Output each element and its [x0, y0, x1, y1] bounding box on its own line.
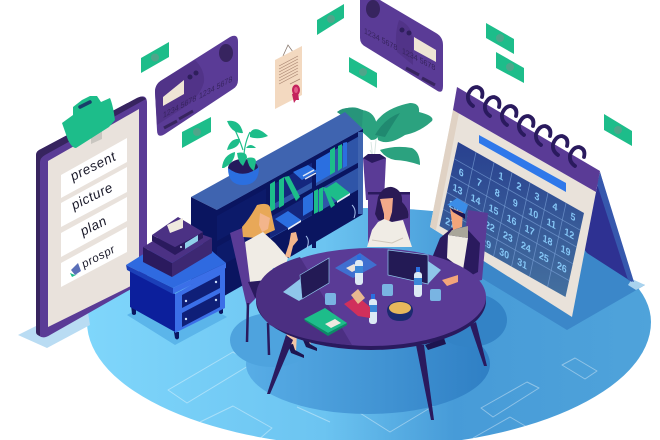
calendar stand: [577, 172, 632, 282]
list item: prospr logo: prospr: [79, 243, 118, 271]
date grid: 10: [528, 206, 539, 223]
date grid: 17: [524, 223, 535, 239]
date grid: 19: [560, 243, 571, 260]
skirt: [248, 280, 267, 298]
date grid: 13: [452, 182, 463, 199]
cash register: [143, 217, 212, 277]
date grid: 25: [538, 250, 550, 266]
date grid: 12: [564, 226, 575, 243]
arms: [266, 275, 296, 293]
face: [259, 213, 270, 232]
date grid: 15: [488, 202, 499, 219]
date grid: 5: [570, 211, 576, 225]
cash cabinet: [126, 228, 227, 345]
floor shadows: [230, 240, 645, 414]
date grid: 23: [502, 229, 514, 246]
laptop left: [283, 258, 329, 301]
date grid: 11: [546, 216, 557, 233]
bookshelf: [191, 112, 363, 300]
clip: [62, 96, 115, 148]
date grid: 14: [470, 192, 481, 209]
legs of woman left: [286, 330, 317, 358]
potted plant on shelf: [222, 121, 268, 185]
list item: picture: [61, 167, 127, 227]
date grid: [440, 142, 584, 297]
date grid: 7: [476, 177, 483, 191]
water bottles: [355, 255, 422, 324]
date grid: 2: [516, 180, 522, 194]
bill: [496, 52, 524, 83]
list item: plan: plan: [77, 213, 109, 239]
cups: [325, 284, 441, 305]
blue notebook: [335, 253, 377, 278]
calendar: [430, 87, 634, 317]
date grid: 21: [466, 209, 478, 226]
shelf front: [217, 129, 363, 300]
list item: present: present: [67, 148, 119, 184]
woman left: [242, 204, 298, 298]
certificate: [275, 45, 302, 109]
date grid: 24: [520, 239, 532, 256]
tissue box: [344, 289, 370, 318]
list item: plan: [61, 197, 127, 257]
woman right: [367, 187, 412, 247]
large plant: [337, 103, 432, 200]
shelf side: [191, 197, 217, 300]
date grid: 6: [458, 166, 465, 180]
list item: prospr logo: [61, 227, 127, 287]
credit card right: 1234 5678: [402, 46, 436, 73]
date grid: 9: [512, 197, 519, 211]
bill: [486, 23, 514, 54]
bill: [141, 42, 169, 73]
man: [428, 198, 480, 282]
date grid: 31: [517, 256, 528, 273]
snack bowl: [387, 301, 413, 321]
bill: [317, 4, 344, 35]
laptop right: [388, 250, 441, 284]
man hand: [442, 275, 458, 286]
credit card left: 1234 5678: [163, 93, 197, 120]
date grid: 22: [484, 219, 496, 236]
date grid: 20: [448, 199, 460, 215]
bill: [349, 57, 377, 88]
date grid: 1: [498, 170, 504, 184]
date grid: 16: [506, 212, 517, 229]
hair: [242, 204, 275, 238]
date grid: 8: [494, 187, 501, 201]
date grid: 27: [445, 215, 456, 232]
credit card right: [360, 0, 443, 92]
clipboard: [36, 96, 147, 337]
spiral rings: [468, 87, 584, 166]
man chair: [458, 210, 488, 285]
floor: [87, 208, 651, 440]
header band: [453, 87, 600, 192]
woman right chair: [368, 192, 410, 245]
bill: [182, 117, 211, 148]
date grid: 28: [463, 226, 474, 242]
books: [270, 142, 350, 230]
bill: [604, 114, 632, 146]
green notebook: [304, 308, 347, 336]
clipboard shadow: [18, 312, 90, 348]
credit card left: 1234 5678: [199, 74, 233, 101]
credit card left: [155, 36, 238, 136]
list item: present: [61, 138, 127, 198]
date grid: 30: [499, 246, 510, 263]
credit card right: 1234 5678: [364, 26, 398, 53]
date grid: 26: [556, 260, 568, 277]
date grid: 4: [552, 201, 558, 215]
date grid: 3: [534, 190, 540, 204]
date grid: 29: [481, 236, 492, 253]
title bar: [479, 135, 566, 192]
torso: [245, 232, 288, 282]
table: [256, 248, 487, 420]
calendar page: [430, 110, 596, 317]
shelf top: [191, 112, 363, 210]
date grid: 18: [542, 233, 553, 250]
woman left chair: [230, 228, 269, 355]
list item: picture: picture: [68, 180, 116, 213]
